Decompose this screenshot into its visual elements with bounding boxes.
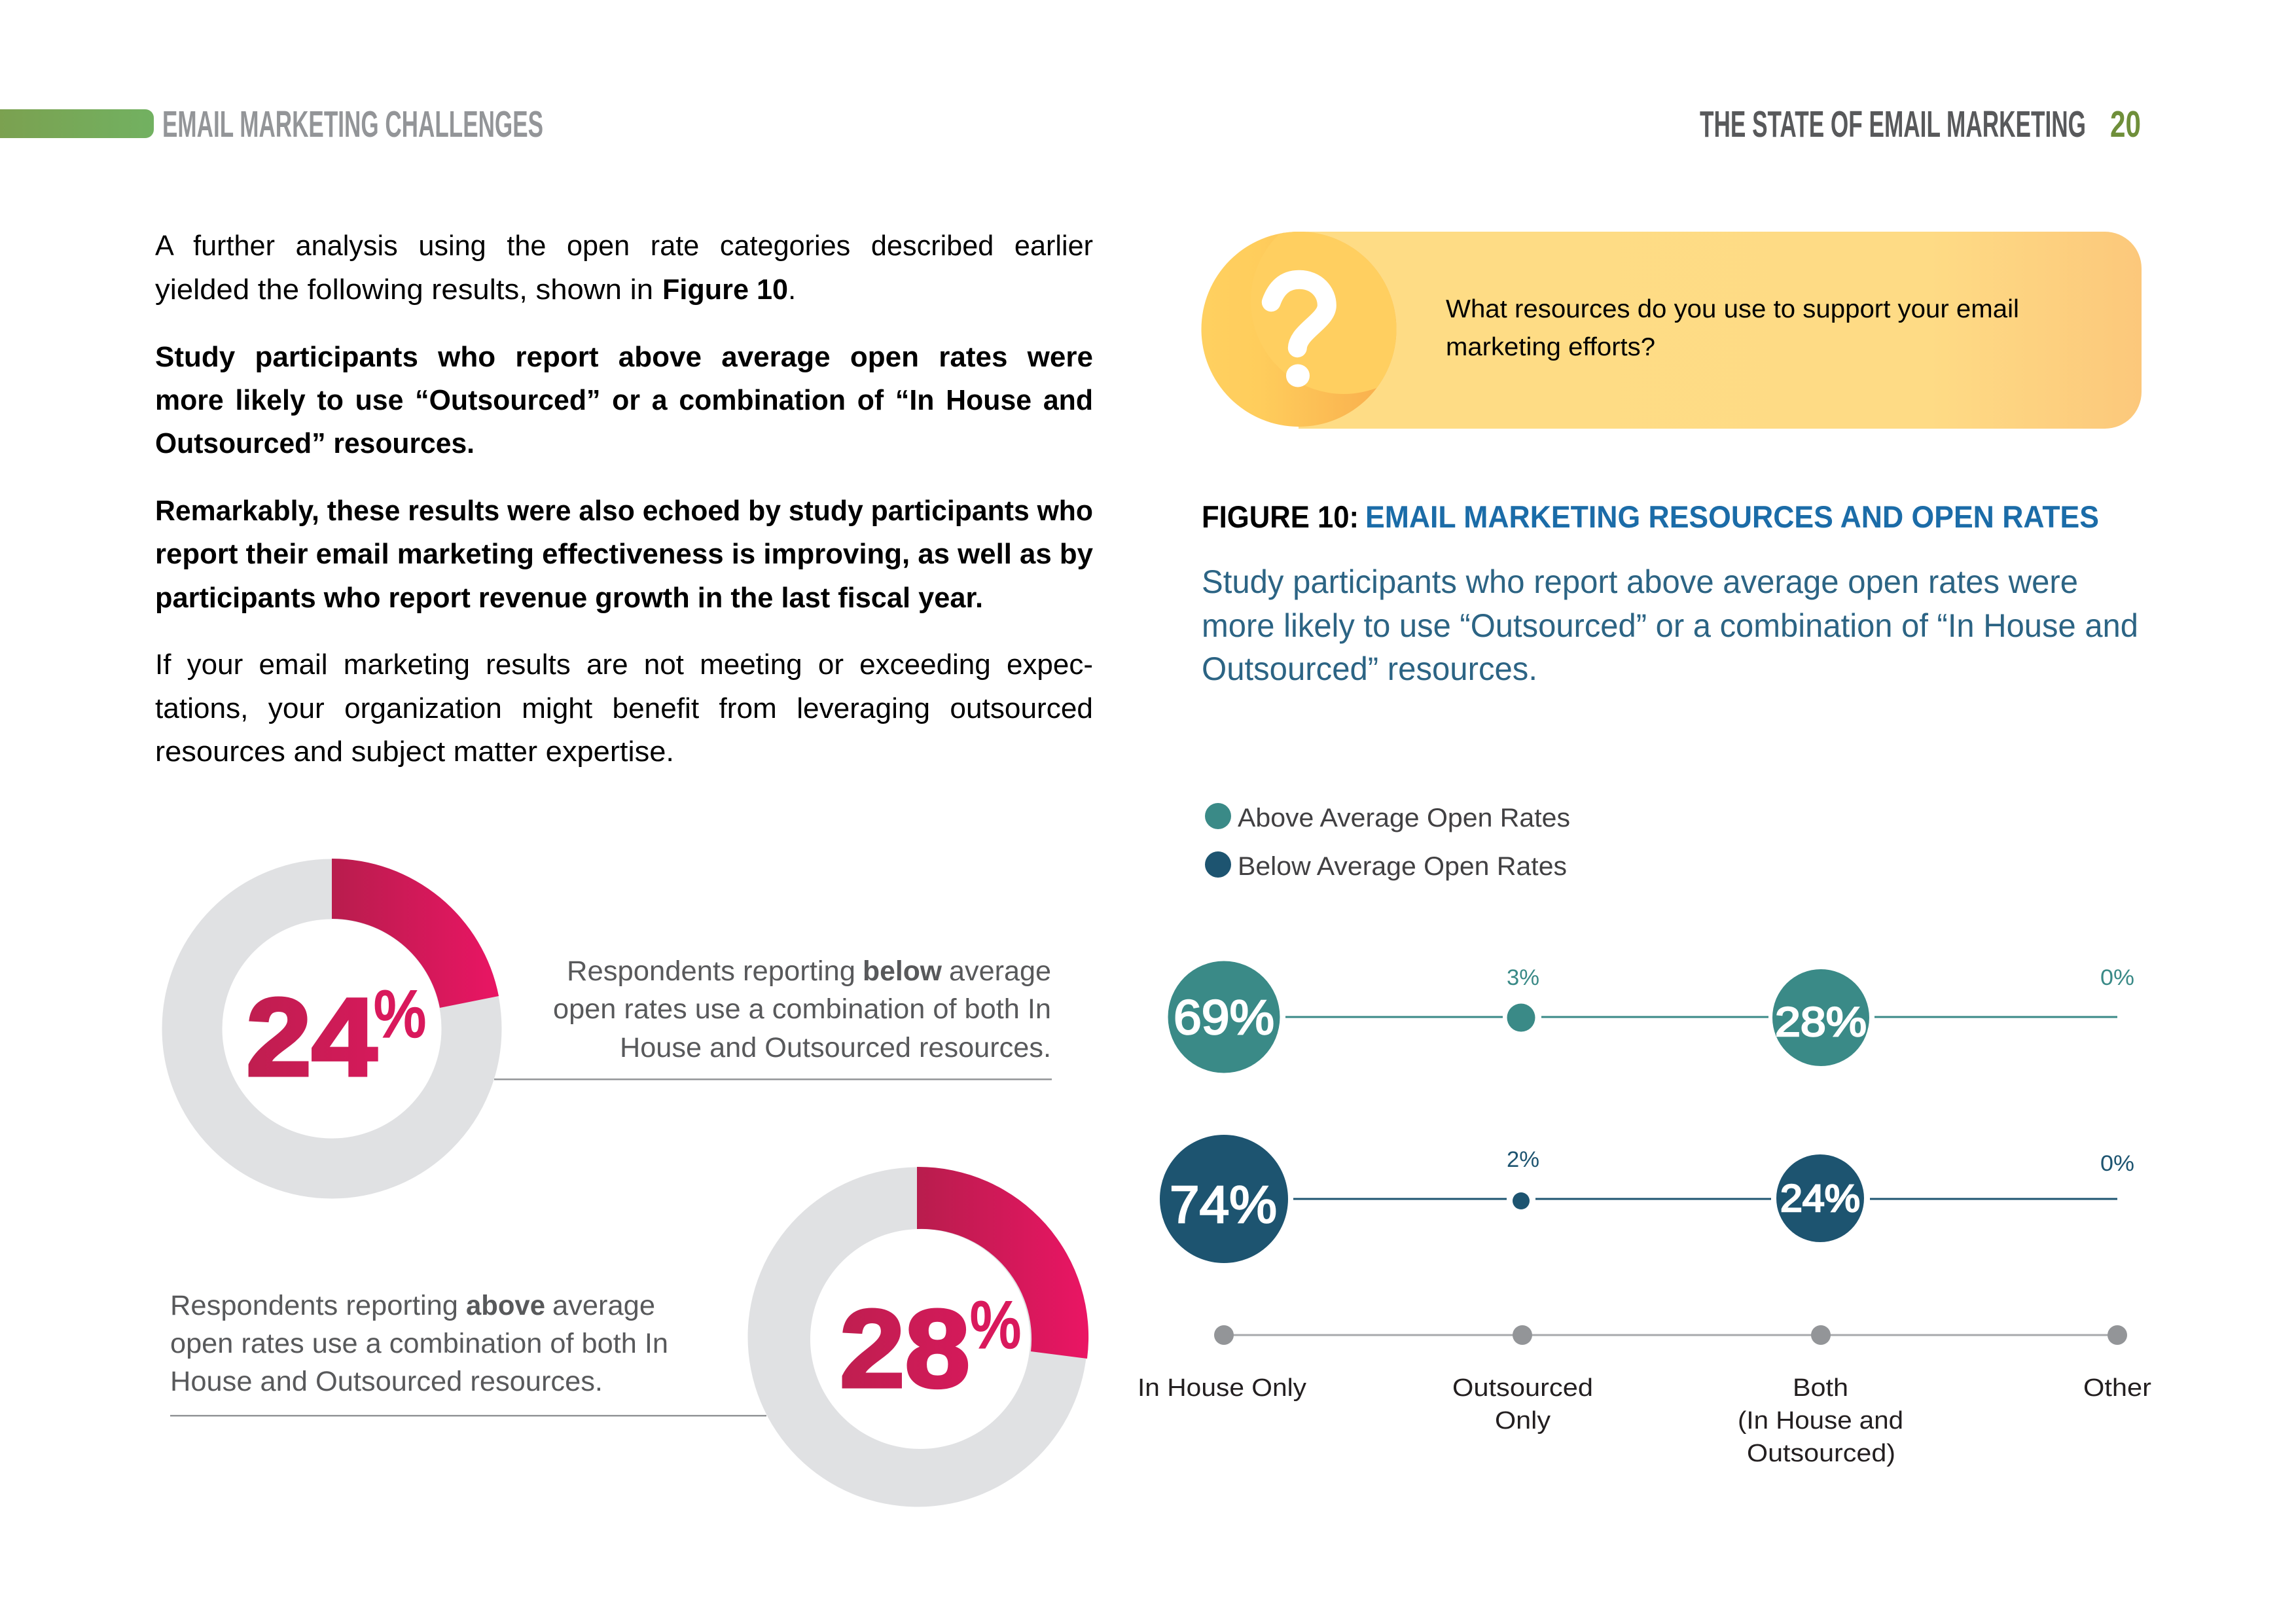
panel: survey question banner: What resources do you use to support your email <box>1446 295 2019 323</box>
axis label: other: Other <box>2083 1374 2151 1402</box>
callout: below average respondents: Respondents reporting <box>567 955 855 987</box>
axis label: both <box>1738 1374 1903 1467</box>
bubble chart row: below average open rates: 2% <box>1507 1147 1539 1172</box>
figure subtitle: more likely to use “Outsourced” or a combination of “In House and <box>1202 607 2138 644</box>
text block: bold finding: Study participants who report above average open rates were <box>155 341 1093 373</box>
panel: survey question banner: marketing efforts? <box>1446 333 1655 361</box>
header: section title with green tab: EMAIL MARKETING CHALLENGES <box>162 103 543 145</box>
bubble chart row: below average open rates: 0% <box>2100 1151 2134 1176</box>
callout: above average respondents: open rates use a combination of both In <box>170 1328 668 1359</box>
axis label: both: (In House and <box>1738 1407 1903 1435</box>
callout: below average respondents <box>494 955 1052 1080</box>
callout: below average respondents: House and Outsourced resources. <box>620 1032 1051 1063</box>
bubble chart row: above average open rates: 28% <box>1775 999 1867 1045</box>
bubble chart row: above average open rates: 3% <box>1507 965 1539 990</box>
axis label: outsourced only <box>1452 1374 1593 1435</box>
text block: bold finding <box>155 341 1093 459</box>
axis label: outsourced only: Outsourced <box>1452 1374 1593 1402</box>
text block: intro paragraph: yielded the following results, shown in <box>155 274 653 306</box>
figure subtitle: Outsourced” resources. <box>1202 651 1537 687</box>
category axis <box>1214 1325 2127 1345</box>
icon: question mark <box>1202 232 1397 427</box>
header: report title and page number: 20 <box>2110 103 2141 145</box>
callout: below average respondents: average <box>949 955 1051 987</box>
figure heading: FIGURE 10: <box>1202 499 1359 534</box>
text block: intro paragraph: A further analysis using the open rate categories described earlier <box>155 230 1093 262</box>
donut chart: 28 percent <box>747 1167 1088 1507</box>
panel: survey question banner <box>1202 232 2142 429</box>
callout: above average respondents: above <box>466 1290 545 1321</box>
text block: bold echoed results: report their email marketing effectiveness is improving, as well as by <box>155 538 1094 570</box>
callout: below average respondents: open rates use a combination of both In <box>553 993 1051 1025</box>
axis label: in house only: In House Only <box>1138 1374 1306 1402</box>
donut chart: 24 percent <box>192 859 499 1169</box>
callout: above average respondents: average <box>552 1290 655 1321</box>
figure subtitle <box>1202 563 2138 687</box>
figure subtitle: Study participants who report above average open rates were <box>1202 563 2078 600</box>
callout: above average respondents: House and Outsourced resources. <box>170 1366 603 1397</box>
text block: bold echoed results <box>155 495 1094 614</box>
text block: closing paragraph: tations, your organization might benefit from leveraging outsourced <box>155 692 1093 724</box>
axis label: both: Both <box>1793 1374 1848 1402</box>
bubble chart row: above average open rates: 0% <box>2100 965 2134 990</box>
text block: bold finding: Outsourced” resources. <box>155 427 475 459</box>
text block: intro paragraph: Figure 10 <box>662 274 788 306</box>
text block: closing paragraph <box>155 649 1093 768</box>
figure heading: EMAIL MARKETING RESOURCES AND OPEN RATES <box>1365 499 2099 534</box>
text block: intro paragraph <box>155 230 1093 306</box>
bubble chart row: below average open rates <box>1160 1135 2134 1263</box>
callout: below average respondents: below <box>863 955 942 987</box>
text block: bold echoed results: Remarkably, these results were also echoed by study participants who <box>155 495 1093 527</box>
text block: closing paragraph: resources and subject matter expertise. <box>155 736 674 768</box>
donut chart: 28 percent: % <box>970 1289 1021 1362</box>
bubble chart row: above average open rates <box>1168 961 2134 1073</box>
legend: Below Average Open Rates <box>1238 852 1567 881</box>
donut chart: 24 percent: % <box>374 978 426 1051</box>
legend: Above Average Open Rates <box>1238 804 1570 832</box>
bubble chart row: above average open rates: 69% <box>1174 990 1274 1044</box>
callout: above average respondents: Respondents reporting <box>170 1290 458 1321</box>
text block: closing paragraph: If your email marketing results are not meeting or exceeding expec- <box>155 649 1093 681</box>
callout: above average respondents <box>170 1290 766 1416</box>
text block: intro paragraph: . <box>788 274 796 306</box>
text block: bold echoed results: participants who report revenue growth in the last fiscal year. <box>155 582 983 614</box>
donut chart: 28 percent: 28 <box>840 1287 970 1410</box>
axis label: both: Outsourced) <box>1747 1440 1895 1467</box>
bubble chart row: below average open rates: 24% <box>1780 1177 1860 1220</box>
legend <box>1205 803 1570 881</box>
text block: bold finding: more likely to use “Outsourced” or a combination of “In House and <box>155 384 1093 416</box>
donut chart: 24 percent: 24 <box>246 975 377 1099</box>
bubble chart row: below average open rates: 74% <box>1170 1175 1277 1234</box>
header: section title with green tab <box>0 103 543 145</box>
axis label: outsourced only: Only <box>1495 1407 1551 1435</box>
